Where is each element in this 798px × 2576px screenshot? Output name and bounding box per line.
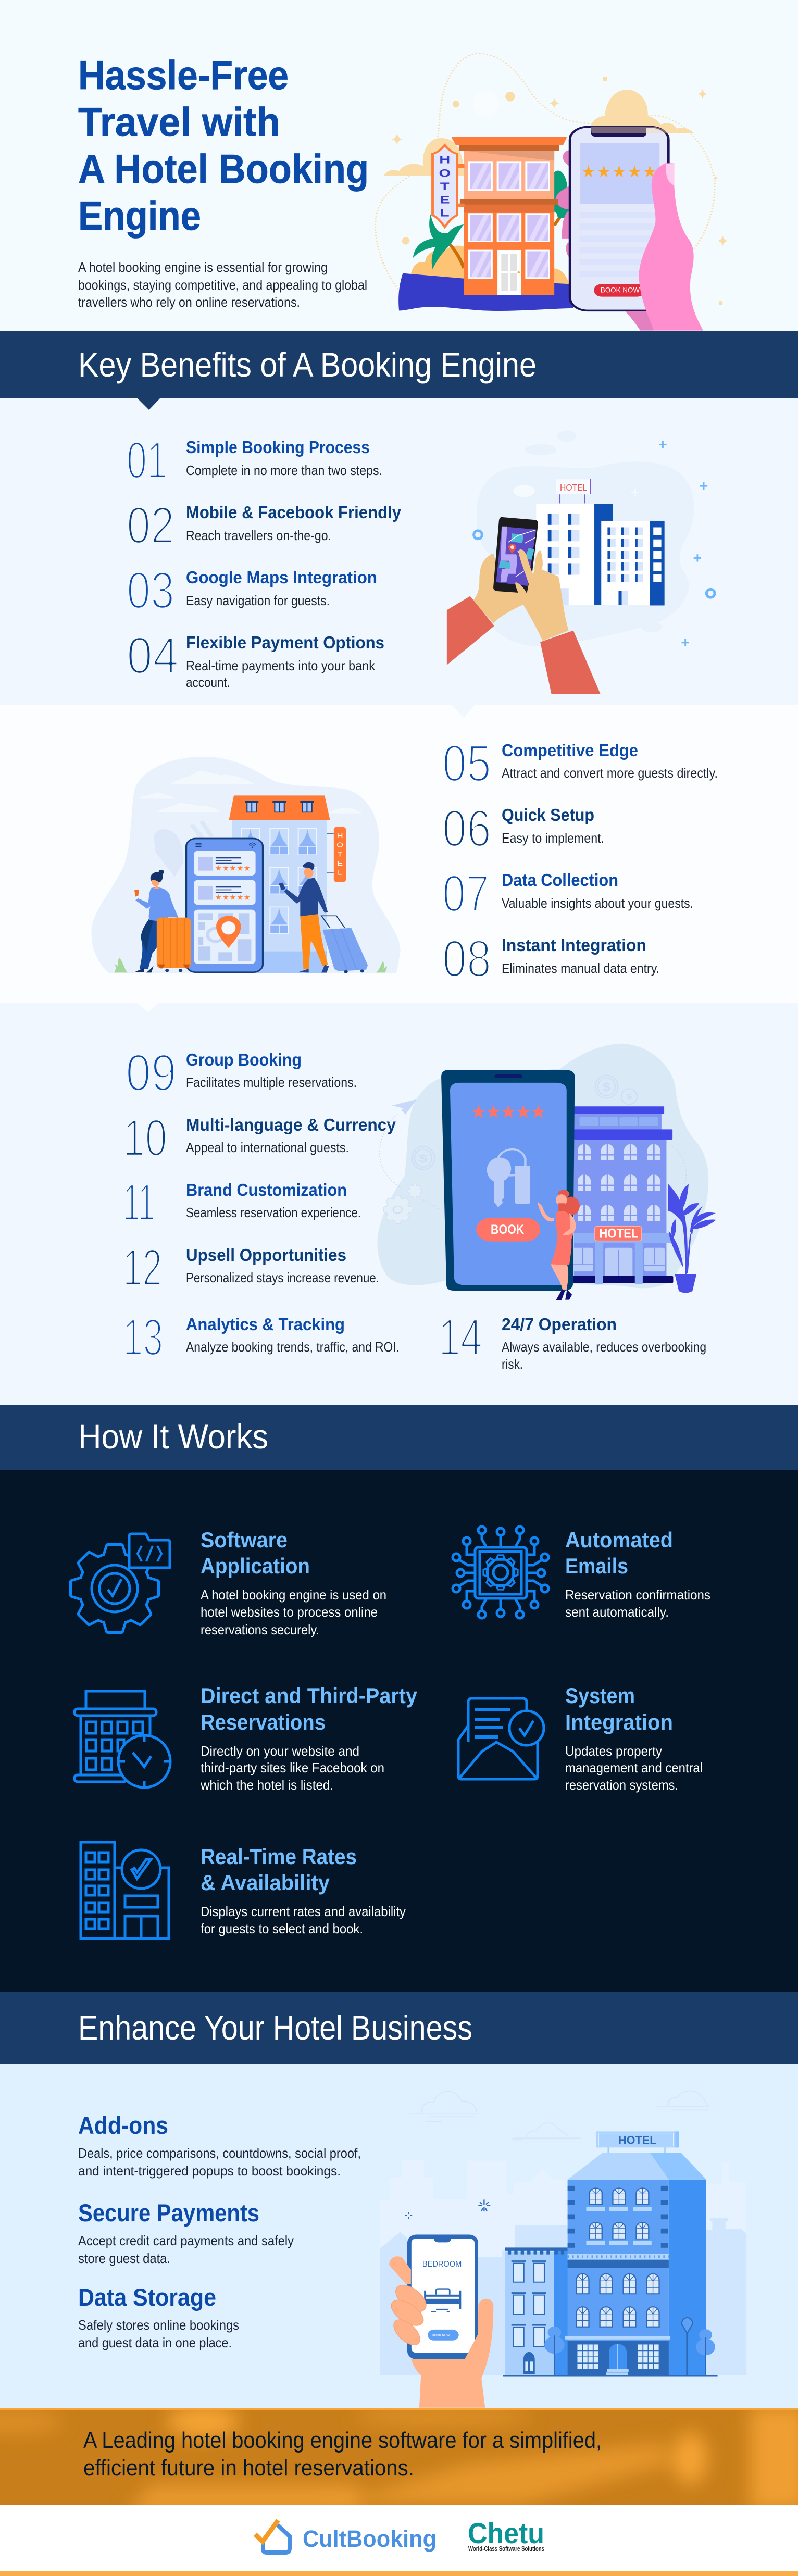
step: real-time rates and availability: Displays current rates and availability bbox=[201, 1904, 406, 1919]
step: real-time rates and availability bbox=[201, 1844, 406, 1936]
man with suitcase bbox=[279, 862, 368, 973]
panel: benefits 05-08 bbox=[0, 705, 798, 1003]
benefit 03: 03 bbox=[127, 561, 174, 620]
icon: gear with code folder bbox=[72, 1534, 170, 1631]
secure payments: Accept credit card payments and safely bbox=[78, 2233, 294, 2248]
illustration: hotel and phone in hand bbox=[376, 53, 728, 331]
step: automated emails: Emails bbox=[565, 1554, 628, 1578]
step: automated emails bbox=[565, 1528, 710, 1620]
hotel building: HOTEL bbox=[618, 2134, 657, 2147]
benefit 02 bbox=[127, 496, 402, 555]
illustration: hotel and phone in hand: BOOK NOW bbox=[601, 286, 640, 294]
intro text: travellers who rely on online reservations. bbox=[78, 294, 300, 310]
illustration: booking phone and hotel bbox=[377, 1044, 716, 1300]
benefit 13: 13 bbox=[123, 1308, 163, 1367]
benefit 04: Flexible Payment Options bbox=[186, 633, 384, 652]
benefit 12: Personalized stays increase revenue. bbox=[186, 1270, 379, 1285]
benefit 14 bbox=[439, 1308, 706, 1372]
illustration: booking phone and hotel: $ bbox=[419, 1153, 427, 1165]
hand bbox=[386, 2256, 493, 2408]
map pin bbox=[216, 916, 241, 948]
benefit 05: Attract and convert more guests directly. bbox=[502, 765, 718, 781]
step: system integration bbox=[565, 1683, 703, 1793]
add-ons: and intent-triggered popups to boost bookings. bbox=[78, 2163, 341, 2179]
step: direct and third-party reservations: Directly on your website and bbox=[201, 1743, 359, 1759]
panel: hero bbox=[0, 0, 798, 331]
benefit 12: 12 bbox=[123, 1239, 162, 1297]
benefit 12: Upsell Opportunities bbox=[186, 1245, 346, 1265]
trees and lamp bbox=[503, 2318, 718, 2377]
benefit 14: Always available, reduces overbooking bbox=[502, 1339, 706, 1355]
benefit 14: 24/7 Operation bbox=[502, 1315, 617, 1334]
step: software application: Application bbox=[201, 1554, 310, 1578]
benefit 04: Real-time payments into your bank bbox=[186, 658, 376, 673]
benefit 02: 02 bbox=[127, 496, 174, 555]
benefit 03: Easy navigation for guests. bbox=[186, 593, 330, 608]
benefit 06 bbox=[442, 799, 604, 858]
benefit 08: Eliminates manual data entry. bbox=[502, 960, 659, 976]
illustration: booking phone and hotel: $ bbox=[603, 1081, 610, 1094]
phone: BEDROOM bbox=[422, 2260, 462, 2269]
intro text: bookings, staying competitive, and appealing to global bbox=[78, 277, 367, 293]
data storage: and guest data in one place. bbox=[78, 2335, 232, 2350]
hotel sign bbox=[334, 827, 346, 882]
benefit 06: Quick Setup bbox=[502, 805, 594, 824]
data storage: Safely stores online bookings bbox=[78, 2317, 239, 2333]
step: system integration: reservation systems. bbox=[565, 1777, 678, 1793]
plants bbox=[114, 958, 387, 972]
illustration: hand holding phone with hotel bbox=[447, 431, 715, 694]
banner: enhance your hotel business bbox=[0, 1992, 798, 2064]
benefit 13 bbox=[123, 1308, 400, 1367]
hotel sign: L bbox=[440, 207, 450, 219]
hotel building bbox=[571, 1106, 673, 1284]
intro text bbox=[78, 259, 367, 310]
hotel sign: E bbox=[440, 194, 450, 206]
benefit 09: Facilitates multiple reservations. bbox=[186, 1074, 357, 1090]
hotel building bbox=[565, 2131, 706, 2375]
title: Engine bbox=[78, 193, 201, 239]
benefit 09: Group Booking bbox=[186, 1050, 302, 1069]
step: software application: reservations securely. bbox=[201, 1622, 319, 1637]
benefit 09 bbox=[126, 1044, 357, 1102]
banner: closing statement bbox=[0, 2405, 798, 2516]
benefit 14: risk. bbox=[502, 1356, 523, 1372]
key icon bbox=[487, 1149, 530, 1207]
woman with suitcase bbox=[134, 870, 191, 972]
hotel sign: O bbox=[439, 167, 451, 179]
benefit 10: Appeal to international guests. bbox=[186, 1140, 349, 1155]
benefit 10: 10 bbox=[123, 1109, 167, 1167]
step: automated emails: Reservation confirmations bbox=[565, 1587, 710, 1603]
benefit 13: Analyze booking trends, traffic, and ROI. bbox=[186, 1339, 400, 1355]
step: real-time rates and availability: Real-Time Rates bbox=[201, 1844, 357, 1869]
title: A Hotel Booking bbox=[78, 146, 369, 192]
title bbox=[78, 52, 369, 239]
hotel building: HOTEL bbox=[599, 1226, 639, 1241]
step: software application bbox=[201, 1528, 386, 1637]
hotel sign: H bbox=[337, 832, 343, 840]
panel: how it works bbox=[0, 1470, 798, 1992]
benefit 04: account. bbox=[186, 674, 230, 690]
illustration: travellers with phone and hotel bbox=[92, 757, 400, 973]
title: Travel with bbox=[78, 99, 280, 145]
step: system integration: System bbox=[565, 1683, 635, 1708]
banner: key benefits bbox=[0, 331, 798, 410]
benefit 07: 07 bbox=[442, 865, 489, 923]
logo: Chetu: Chetu bbox=[468, 2517, 544, 2549]
step: system integration: management and central bbox=[565, 1760, 703, 1775]
banner: key benefits: Key Benefits of A Booking Engine bbox=[78, 345, 537, 384]
benefit 03 bbox=[127, 561, 377, 620]
step: system integration: Integration bbox=[565, 1710, 673, 1734]
secure payments: store guest data. bbox=[78, 2250, 170, 2266]
icon: hotel with check badge bbox=[81, 1842, 169, 1939]
step: direct and third-party reservations: Reservations bbox=[201, 1710, 326, 1734]
benefit 10: Multi-language & Currency bbox=[186, 1115, 396, 1134]
hotel sign: L bbox=[338, 869, 342, 877]
benefit 01: Complete in no more than two steps. bbox=[186, 462, 382, 478]
banner: enhance your hotel business: Enhance Your Hotel Business bbox=[78, 2008, 472, 2047]
hotel sign: T bbox=[338, 851, 343, 858]
benefit 07: Data Collection bbox=[502, 870, 618, 890]
add-ons: Deals, price comparisons, countdowns, social proof, bbox=[78, 2145, 361, 2161]
benefit 03: Google Maps Integration bbox=[186, 568, 377, 587]
step: direct and third-party reservations: which the hotel is listed. bbox=[200, 1777, 333, 1793]
benefit 10 bbox=[123, 1109, 396, 1167]
benefit 05: 05 bbox=[442, 734, 491, 793]
benefit 01 bbox=[127, 431, 382, 490]
benefit 06: Easy to implement. bbox=[502, 830, 604, 846]
illustration: booking phone and hotel: $ bbox=[626, 1092, 632, 1102]
logo: CultBooking: CultBooking bbox=[303, 2525, 437, 2552]
banner: how it works: How It Works bbox=[78, 1417, 268, 1456]
hotel sign bbox=[433, 145, 457, 227]
woman bbox=[537, 1190, 580, 1300]
hotel sign: O bbox=[336, 842, 343, 849]
step: real-time rates and availability: & Availability bbox=[201, 1870, 330, 1895]
phone: BOOK NOW bbox=[432, 2334, 450, 2337]
secure payments: Secure Payments bbox=[78, 2199, 259, 2227]
benefit 01: Simple Booking Process bbox=[186, 437, 370, 457]
benefit 07: Valuable insights about your guests. bbox=[502, 895, 693, 911]
hotel sign: H bbox=[439, 154, 450, 166]
benefit 05: Competitive Edge bbox=[502, 741, 638, 760]
add-ons bbox=[78, 2111, 361, 2179]
benefit 04: 04 bbox=[127, 627, 179, 685]
step: automated emails: sent automatically. bbox=[565, 1604, 669, 1620]
panel: benefits 01-04 bbox=[0, 398, 798, 705]
illustration: hand holding phone with hotel: HOTEL bbox=[560, 482, 587, 493]
benefit 11: Seamless reservation experience. bbox=[186, 1205, 361, 1220]
step: direct and third-party reservations bbox=[200, 1683, 418, 1793]
panel: enhance your hotel business bbox=[0, 2064, 798, 2408]
footer logos bbox=[0, 2505, 798, 2571]
logo: CultBooking bbox=[255, 2520, 437, 2553]
step: software application: Software bbox=[201, 1528, 288, 1552]
benefit 08: 08 bbox=[442, 930, 491, 988]
benefit 14: 14 bbox=[439, 1308, 482, 1367]
benefit 05 bbox=[442, 734, 718, 793]
hotel sign: E bbox=[337, 860, 343, 868]
intro text: A hotel booking engine is essential for growing bbox=[78, 259, 328, 275]
step: direct and third-party reservations: Direct and Third-Party bbox=[201, 1683, 418, 1708]
step: software application: A hotel booking engine is used on bbox=[201, 1587, 386, 1603]
title: Hassle-Free bbox=[78, 52, 289, 98]
illustration: booking phone and hotel: BOOK bbox=[491, 1222, 525, 1236]
benefit 08 bbox=[442, 930, 659, 988]
data storage: Data Storage bbox=[78, 2283, 216, 2311]
benefit 11: Brand Customization bbox=[186, 1180, 347, 1199]
plant bbox=[668, 1183, 716, 1293]
benefit 01: 01 bbox=[127, 431, 167, 490]
add-ons: Add-ons bbox=[78, 2111, 168, 2139]
step: software application: hotel websites to process online bbox=[201, 1604, 378, 1620]
step: automated emails: Automated bbox=[565, 1528, 673, 1552]
illustration: phone booking and hotel skyline bbox=[380, 2091, 746, 2408]
step: real-time rates and availability: for guests to select and book. bbox=[201, 1921, 363, 1936]
benefit 02: Reach travellers on-the-go. bbox=[186, 528, 331, 543]
benefit 04 bbox=[127, 627, 384, 690]
icon: envelope with document and check bbox=[458, 1698, 544, 1779]
benefit 13: Analytics & Tracking bbox=[186, 1315, 345, 1334]
logo: Chetu: World-Class Software Solutions bbox=[468, 2545, 544, 2553]
left building bbox=[505, 2247, 568, 2375]
data storage bbox=[78, 2283, 239, 2350]
benefit 02: Mobile & Facebook Friendly bbox=[186, 503, 402, 522]
benefit 07 bbox=[442, 865, 693, 923]
hotel sign: T bbox=[440, 181, 450, 193]
phone bbox=[407, 2234, 478, 2359]
icon: circuit chip bbox=[453, 1527, 548, 1618]
panel: benefits 09-14 bbox=[0, 1003, 798, 1405]
step: system integration: Updates property bbox=[565, 1743, 662, 1759]
banner: closing statement: efficient future in hotel reservations. bbox=[83, 2455, 414, 2481]
banner: closing statement: A Leading hotel booking engine software for a simplified, bbox=[83, 2428, 602, 2453]
step: direct and third-party reservations: third-party sites like Facebook on bbox=[201, 1760, 384, 1775]
icon: hotel with clock bbox=[74, 1691, 170, 1787]
benefit 09: 09 bbox=[126, 1044, 177, 1102]
secure payments bbox=[78, 2199, 294, 2266]
banner: how it works bbox=[0, 1405, 798, 1470]
benefit 06: 06 bbox=[442, 799, 491, 858]
benefit 11: 11 bbox=[123, 1173, 155, 1232]
benefit 11 bbox=[123, 1173, 361, 1232]
benefit 12 bbox=[123, 1239, 379, 1297]
benefit 08: Instant Integration bbox=[502, 935, 646, 955]
